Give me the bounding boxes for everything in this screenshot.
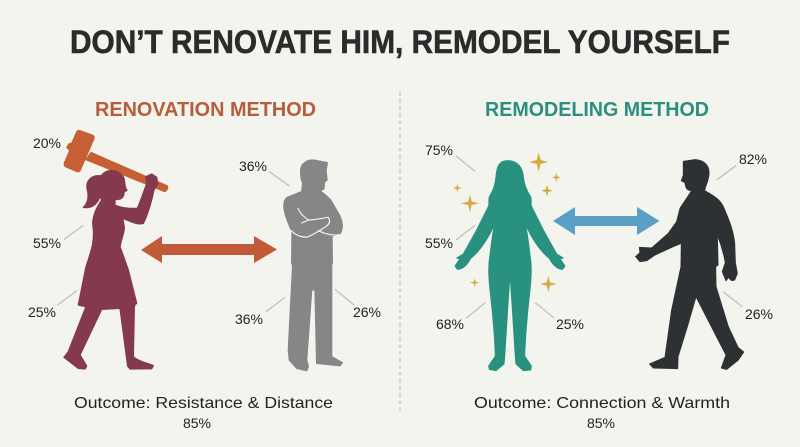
icon: hammer: [64, 130, 168, 192]
outcome: connection and warmth: Outcome: Connection & Warmth: [474, 395, 730, 412]
leader line: 25%: [57, 291, 77, 305]
leader line: 25%: [535, 303, 554, 318]
figure: woman with open arms: [453, 153, 565, 371]
leader line: 26%: [335, 289, 354, 305]
woman silhouette: [64, 171, 158, 369]
leader line: 36% top: [269, 172, 289, 186]
title: DON’T RENOVATE HIM, REMODEL YOURSELF: [70, 24, 730, 60]
arrow: double-headed red: [141, 236, 277, 263]
panel: remodeling method: [425, 99, 773, 431]
man silhouette: [636, 160, 744, 369]
label: 82%: 82%: [739, 151, 767, 167]
leader line: 82%: [717, 166, 736, 180]
label: 55%: 55%: [425, 235, 453, 251]
man silhouette: [284, 160, 342, 371]
arrow: double-headed blue: [553, 207, 660, 235]
outcome value: 85%: [587, 415, 615, 431]
label: 26%: 26%: [745, 306, 773, 322]
heading: remodeling method: REMODELING METHOD: [485, 99, 709, 121]
sparkles: [453, 153, 561, 292]
label: 75%: 75%: [425, 142, 453, 158]
label: 20%: 20%: [33, 135, 61, 151]
outcome value: 85%: [183, 415, 211, 431]
leader line: 75%: [456, 156, 475, 171]
label: 36% bottom: 36%: [235, 311, 263, 327]
label: 36% top: 36%: [239, 158, 267, 174]
figure: man walking: [636, 160, 744, 369]
crossed arm lines: [291, 208, 340, 237]
panel: renovation method: [28, 99, 381, 431]
leader line: 68%: [466, 303, 485, 318]
leader line: 26%: [723, 292, 742, 307]
label: 25%: 25%: [28, 304, 56, 320]
label: 26%: 26%: [353, 304, 381, 320]
figure: woman with hammer: [57, 130, 168, 369]
label: 68%: 68%: [436, 316, 464, 332]
label: 25%: 25%: [556, 316, 584, 332]
woman silhouette: [455, 161, 565, 371]
label: 55%: 55%: [33, 235, 61, 251]
leader line: 55%: [456, 225, 475, 240]
leader line: 55%: [64, 225, 83, 239]
leader line: 36% bottom: [266, 297, 285, 312]
figure: man with crossed arms: [266, 160, 354, 371]
heading: renovation method: RENOVATION METHOD: [95, 99, 316, 121]
outcome: resistance and distance: Outcome: Resistance & Distance: [74, 395, 333, 412]
